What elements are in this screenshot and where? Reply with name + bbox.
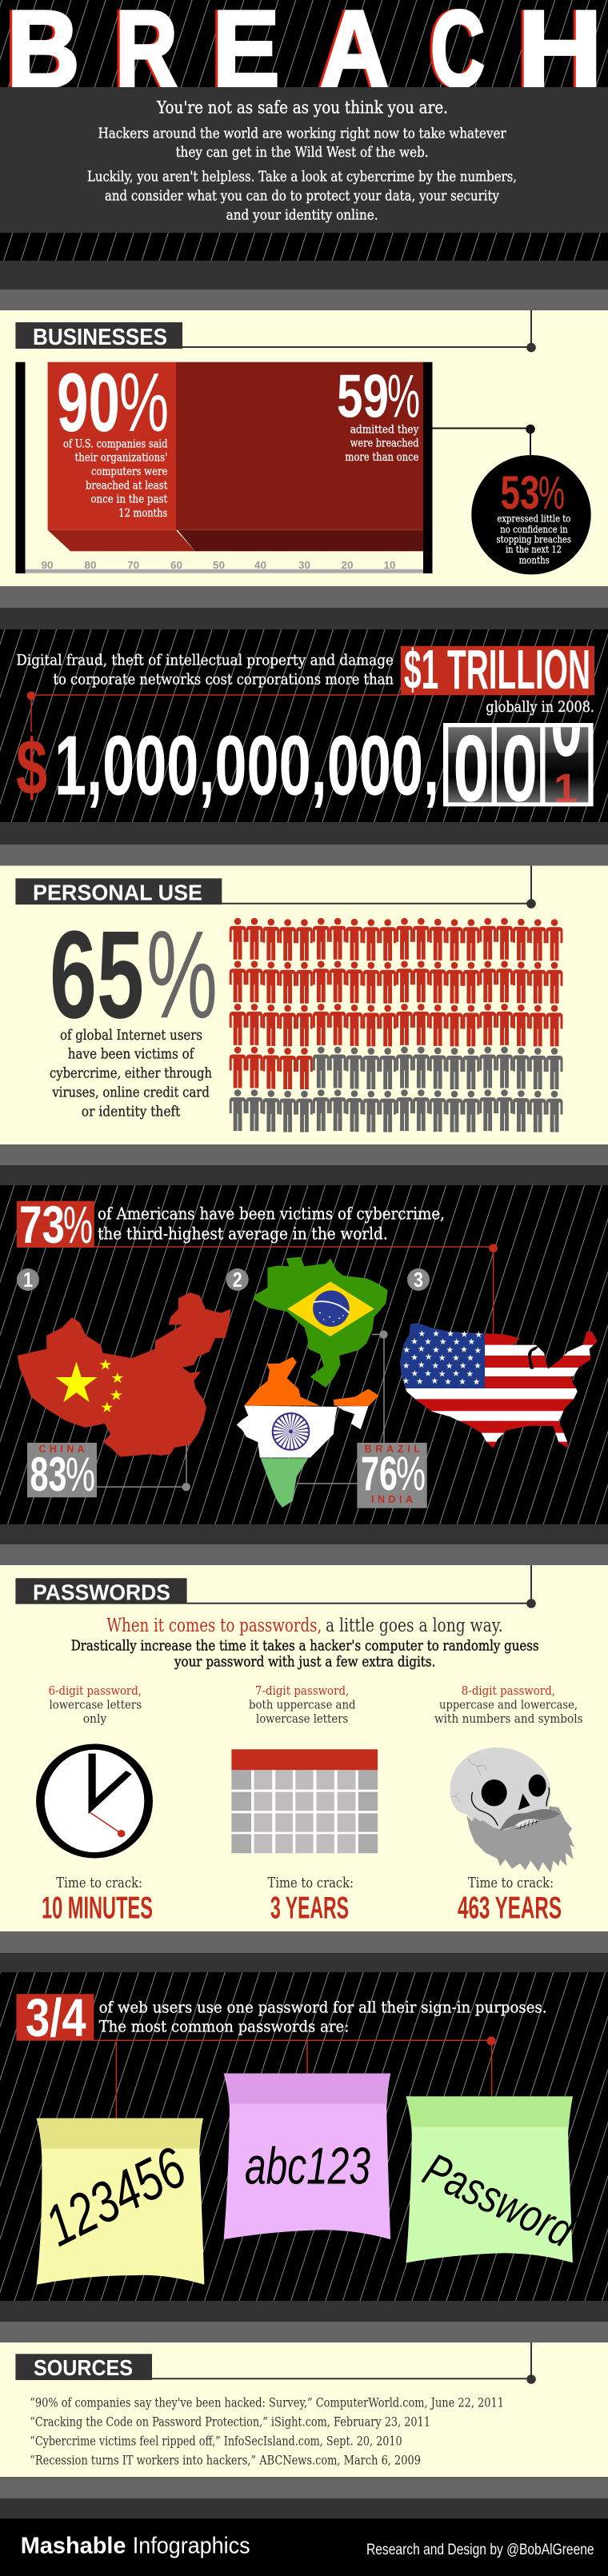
panel: passwords — [15, 1565, 583, 1925]
footer — [21, 2534, 594, 2559]
axis labels: 80 — [85, 559, 96, 571]
axis labels: 70 — [127, 559, 139, 571]
text: web users — [99, 1998, 547, 2036]
intro text: and your identity online. — [226, 207, 378, 224]
connector: china — [97, 1445, 190, 1491]
icon: clock — [40, 1747, 149, 1855]
column: 8-digit: 8-digit password, — [462, 1683, 555, 1698]
intro text: and consider what you can do to protect your data, your security — [105, 188, 500, 205]
badge: 1: 1 — [23, 1268, 33, 1292]
stat circle: 53%: months — [519, 554, 550, 565]
connector to circle — [432, 425, 534, 455]
stat circle: 53%: no confidence in — [500, 524, 568, 535]
stat circle: 53%: % — [538, 467, 565, 519]
text: intro: When it comes to passwords, — [106, 1615, 322, 1636]
panel: personal use — [15, 865, 562, 1132]
stat: 65%: viruses, online credit card — [52, 1084, 210, 1101]
panel: countries — [17, 1195, 606, 1508]
axis labels — [42, 559, 395, 571]
stat: 65%: % — [146, 905, 218, 1044]
column: 8-digit: with numbers and symbols — [434, 1711, 583, 1726]
panel: common passwords — [16, 1988, 582, 2285]
stat: 90%: 90 — [57, 357, 120, 449]
intro text — [87, 98, 517, 224]
result: 10 minutes — [42, 1875, 153, 1925]
panel: businesses — [15, 310, 591, 574]
title: BREACH — [5, 0, 602, 110]
stat: 65% — [50, 905, 218, 1120]
panel: one trillion — [16, 646, 594, 808]
badge: 1 — [17, 1268, 39, 1292]
text: intro: a little goes a long way. — [326, 1615, 503, 1636]
stat: 65%: of global Internet users — [60, 1027, 202, 1044]
counter: odometer: 0 — [550, 671, 582, 777]
stat circle: 53%: in the next 12 — [506, 544, 562, 555]
counter: odometer: 0 — [453, 717, 490, 822]
axis labels: 10 — [384, 559, 395, 571]
pictogram: 65 of 100 people — [230, 918, 562, 1132]
label: brazil india 76%: % — [396, 1447, 426, 1500]
stat: 59% — [337, 363, 420, 464]
stat: 90%: of U.S. companies said — [63, 437, 167, 450]
text: web users: The most common passwords are: — [99, 2017, 349, 2036]
label: china 83%: 83 — [30, 1448, 67, 1501]
list: sources — [30, 2395, 504, 2468]
intro text: Luckily, you aren't helpless. Take a look at cybercrime by the numbers, — [87, 169, 517, 186]
badge: 2 — [226, 1268, 249, 1292]
result: 463 years: Time to crack: — [468, 1875, 554, 1891]
badge: 3: 3 — [414, 1268, 423, 1292]
text: intro: your password with just a few extra digits. — [174, 1653, 435, 1670]
chart: breach bars — [15, 362, 432, 573]
axis labels: 50 — [213, 559, 225, 571]
stat: 59%: 59 — [337, 363, 389, 431]
big number: 1,000,000,000, — [54, 718, 439, 813]
stat: 59%: were breached — [350, 437, 419, 449]
column: 7-digit: 7-digit password, — [255, 1683, 349, 1698]
axis labels: 90 — [42, 559, 53, 571]
axis labels: 30 — [298, 559, 310, 571]
map: usa — [400, 1323, 598, 1448]
label: brazil india 76%: INDIA — [371, 1494, 413, 1505]
panel: sources — [15, 2342, 536, 2468]
stat: 90%: once in the past — [90, 493, 168, 506]
column: 6-digit: only — [83, 1711, 107, 1726]
text: intro — [71, 1615, 539, 1670]
result: 10 minutes: Time to crack: — [56, 1875, 142, 1891]
stars — [402, 1330, 482, 1385]
result: 3 years: 3 YEARS — [270, 1891, 349, 1925]
icon: calendar — [231, 1749, 378, 1853]
map: india — [237, 1357, 379, 1508]
label: china 83%: CHINA — [38, 1444, 85, 1455]
stat: 90%: breached at least — [86, 479, 168, 492]
panel: intro — [0, 87, 608, 233]
axis labels: 20 — [341, 559, 354, 571]
list: sources: “Cracking the Code on Password Protection,” iSight.com, February 23, 2011 — [30, 2414, 430, 2429]
heading: sources: SOURCES — [34, 2355, 133, 2380]
callout: 73%: 73 — [19, 1195, 65, 1254]
icon: bearded skull — [450, 1747, 574, 1873]
note: yellow: 123456 — [35, 2135, 196, 2258]
logo: mashable infographics — [21, 2534, 250, 2559]
column: 6-digit — [49, 1683, 142, 1726]
text: digital fraud: to corporate networks cost corporations more than — [53, 671, 394, 689]
callout: 73%: % — [63, 1195, 93, 1254]
logo: mashable infographics: Mashable — [21, 2534, 126, 2559]
stat: 90%: 12 months — [118, 507, 167, 520]
list: sources: “Cybercrime victims feel ripped off,” InfoSecIsland.com, Sept. 20, 2010 — [30, 2434, 402, 2448]
heading: personal use: PERSONAL USE — [33, 880, 202, 905]
stat circle: 53%: 53 — [501, 467, 539, 519]
column: 8-digit: uppercase and lowercase, — [439, 1698, 578, 1712]
callout: 3/4: 3/4 — [26, 1988, 86, 2048]
badge: 2: 2 — [233, 1268, 242, 1292]
intro text: Hackers around the world are working right now to take whatever — [98, 126, 506, 142]
axis labels: 60 — [170, 559, 182, 571]
badge: 3 — [407, 1268, 430, 1292]
column: 6-digit: lowercase letters — [50, 1698, 142, 1712]
result: 463 years — [458, 1875, 562, 1925]
heading: businesses: BUSINESSES — [33, 325, 167, 350]
text: americans — [98, 1204, 445, 1243]
column: 7-digit — [249, 1683, 356, 1726]
stat circle: 53%: stopping breaches — [496, 533, 571, 545]
stat: 65%: have been victims of — [68, 1045, 195, 1062]
big number: $ — [16, 723, 47, 811]
result: 3 years — [267, 1875, 354, 1925]
note: green — [406, 2096, 582, 2262]
logo: mashable infographics: Infographics — [133, 2534, 250, 2559]
text: digital fraud: Digital fraud, theft of intellectual property and damage — [16, 652, 394, 669]
note: purple — [224, 2074, 390, 2239]
stat: 90%: computers were — [91, 465, 167, 478]
text: americans: of Americans have been victims of cybercrime, — [98, 1204, 445, 1223]
connector: red line — [27, 692, 401, 732]
map: brazil — [254, 1257, 388, 1388]
heading: passwords — [15, 1565, 536, 1608]
result: 10 minutes: 10 MINUTES — [42, 1891, 153, 1925]
heading: passwords: PASSWORDS — [33, 1580, 170, 1604]
intro text: they can get in the Wild West of the web. — [176, 144, 429, 161]
heading: sources — [15, 2342, 536, 2384]
stat circle: 53% — [471, 455, 591, 574]
list: sources: “90% of companies say they've been hacked: Survey,” ComputerWorld.com, June 22, 2011 — [30, 2395, 504, 2410]
heading: personal use — [15, 865, 536, 909]
counter: odometer — [443, 723, 594, 806]
connector: india — [297, 1483, 357, 1484]
label: brazil india 76%: 76 — [361, 1447, 398, 1500]
intro text: You're not as safe as you think you are. — [156, 98, 448, 118]
stat: 90%: their organizations' — [75, 452, 167, 465]
label: brazil india 76%: BRAZIL — [365, 1444, 420, 1455]
stat circle: 53%: expressed little to — [497, 513, 570, 525]
counter: odometer: 1 — [554, 765, 578, 812]
text: americans: the third-highest average in the world. — [98, 1224, 388, 1243]
map: china — [18, 1292, 230, 1457]
connector: notes — [94, 2037, 495, 2119]
text: digital fraud — [16, 652, 594, 716]
column: 8-digit — [434, 1683, 583, 1726]
label: brazil india 76% — [357, 1443, 427, 1508]
connector: 73% to USA — [94, 1244, 497, 1334]
counter: odometer: 0 — [502, 717, 538, 822]
stat: 59%: % — [387, 363, 420, 431]
column: 7-digit: both uppercase and — [249, 1698, 356, 1712]
axis labels: 40 — [254, 559, 266, 571]
list: sources: “Recession turns IT workers into hackers,” ABCNews.com, March 6, 2009 — [30, 2454, 421, 2468]
stat: 65%: cybercrime, either through — [50, 1065, 212, 1082]
result: 3 years: Time to crack: — [267, 1875, 354, 1891]
stat: 59%: more than once — [345, 451, 419, 464]
stat: 65%: 65 — [50, 905, 144, 1044]
stat: 90% — [57, 357, 169, 520]
connector: brazil — [372, 1331, 387, 1443]
column: 7-digit: lowercase letters — [256, 1711, 348, 1726]
stat: 65%: or identity theft — [82, 1104, 181, 1120]
stat: 59%: admitted they — [350, 424, 419, 437]
heading: businesses — [15, 310, 536, 352]
text: web users: of web users use one password for all their sign-in purposes. — [99, 1998, 547, 2017]
big number — [16, 718, 439, 813]
stat: 90%: % — [119, 357, 169, 449]
label: china 83%: % — [66, 1448, 95, 1501]
column: 6-digit: 6-digit password, — [49, 1683, 142, 1698]
note: purple: abc123 — [245, 2137, 370, 2195]
